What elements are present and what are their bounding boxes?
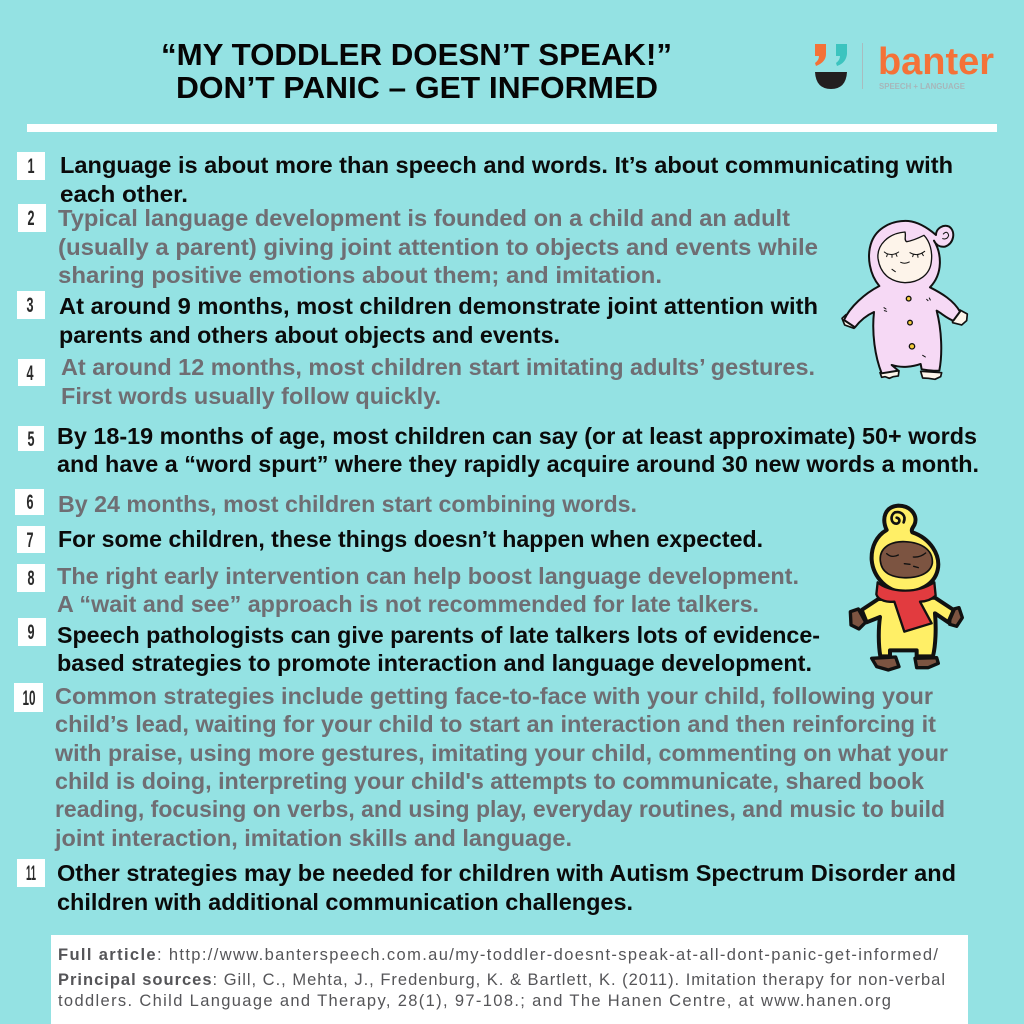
item 1: 1 — [28, 155, 35, 178]
item 2: sharing positive emotions about them; and imitation. — [58, 262, 662, 288]
sources footer: toddlers. Child Language and Therapy, 28(1), 97-108.; and The Hanen Centre, at www.hanen.org — [58, 992, 891, 1010]
item 4: First words usually follow quickly. — [61, 383, 441, 409]
item 10: reading, focusing on verbs, and using play, everyday routines, and music to build — [55, 796, 945, 822]
item 5: By 18-19 months of age, most children can say (or at least approximate) 50+ words — [57, 423, 977, 449]
item 9 — [18, 618, 820, 676]
sources footer — [51, 935, 968, 1024]
item 2: 2 — [28, 207, 34, 230]
item 10: child’s lead, waiting for your child to start an interaction and then reinforcing it — [55, 711, 936, 737]
item 9: based strategies to promote interaction and language development. — [57, 650, 812, 676]
item 8: A “wait and see” approach is not recommended for late talkers. — [57, 591, 759, 617]
item 10: with praise, using more gestures, imitating your child, commenting on what your — [54, 740, 948, 766]
logo: banter speech and language: banter — [878, 41, 994, 83]
item 8: 8 — [28, 567, 35, 590]
item 3: parents and others about objects and events. — [59, 322, 560, 348]
item 10: joint interaction, imitation skills and language. — [54, 825, 572, 851]
logo: banter speech and language — [815, 41, 994, 91]
item 4 — [18, 354, 815, 409]
item 8 — [17, 563, 799, 617]
item 5 — [18, 423, 979, 477]
item 1: each other. — [60, 181, 188, 207]
icon: yellow baby with scarf — [850, 506, 962, 670]
item 4: At around 12 months, most children start imitating adults’ gestures. — [61, 354, 815, 380]
icon: pink baby — [842, 221, 967, 379]
title — [161, 37, 672, 105]
item 2: (usually a parent) giving joint attention to objects and events while — [58, 234, 818, 260]
item 10: child is doing, interpreting your child's attempts to communicate, shared book — [55, 768, 924, 794]
item 3: At around 9 months, most children demonstrate joint attention with — [59, 293, 818, 319]
title: DON’T PANIC – GET INFORMED — [176, 70, 658, 105]
item 3 — [17, 291, 818, 348]
item 11 — [17, 859, 956, 915]
item 5: 5 — [28, 428, 35, 451]
divider bar — [27, 124, 997, 132]
item 8: The right early intervention can help boost language development. — [57, 563, 799, 589]
sources footer: Principal sources: Gill, C., Mehta, J., Fredenburg, K. & Bartlett, K. (2011). Imitation therapy for non-verbal — [58, 971, 945, 989]
item 2: Typical language development is founded on a child and an adult — [58, 205, 790, 231]
item 7: 7 — [26, 529, 34, 552]
item 1 — [17, 152, 953, 207]
item 11: 11 — [26, 862, 36, 885]
item 2 — [18, 204, 818, 288]
item 5: and have a “word spurt” where they rapidly acquire around 30 new words a month. — [57, 451, 979, 477]
item 6: By 24 months, most children start combining words. — [58, 491, 637, 517]
item 10: Common strategies include getting face-to-face with your child, following your — [55, 683, 933, 709]
item 9: 9 — [28, 621, 34, 644]
logo: banter speech and language: SPEECH + LANGUAGE — [879, 82, 966, 91]
item 9: Speech pathologists can give parents of late talkers lots of evidence- — [57, 622, 820, 648]
item 3: 3 — [26, 294, 34, 317]
item 11: children with additional communication challenges. — [57, 889, 633, 915]
item 7: For some children, these things doesn’t happen when expected. — [58, 526, 763, 552]
item 11: Other strategies may be needed for children with Autism Spectrum Disorder and — [57, 860, 956, 886]
item 10 — [14, 683, 948, 851]
item 1: Language is about more than speech and words. It’s about communicating with — [60, 152, 953, 178]
item 6: 6 — [26, 491, 34, 514]
title: “MY TODDLER DOESN’T SPEAK!” — [161, 37, 672, 72]
item 4: 4 — [26, 362, 34, 385]
item 10: 10 — [22, 687, 36, 710]
sources footer: Full article: http://www.banterspeech.com.au/my-toddler-doesnt-speak-at-all-dont-panic-get-informed/ — [58, 946, 938, 964]
